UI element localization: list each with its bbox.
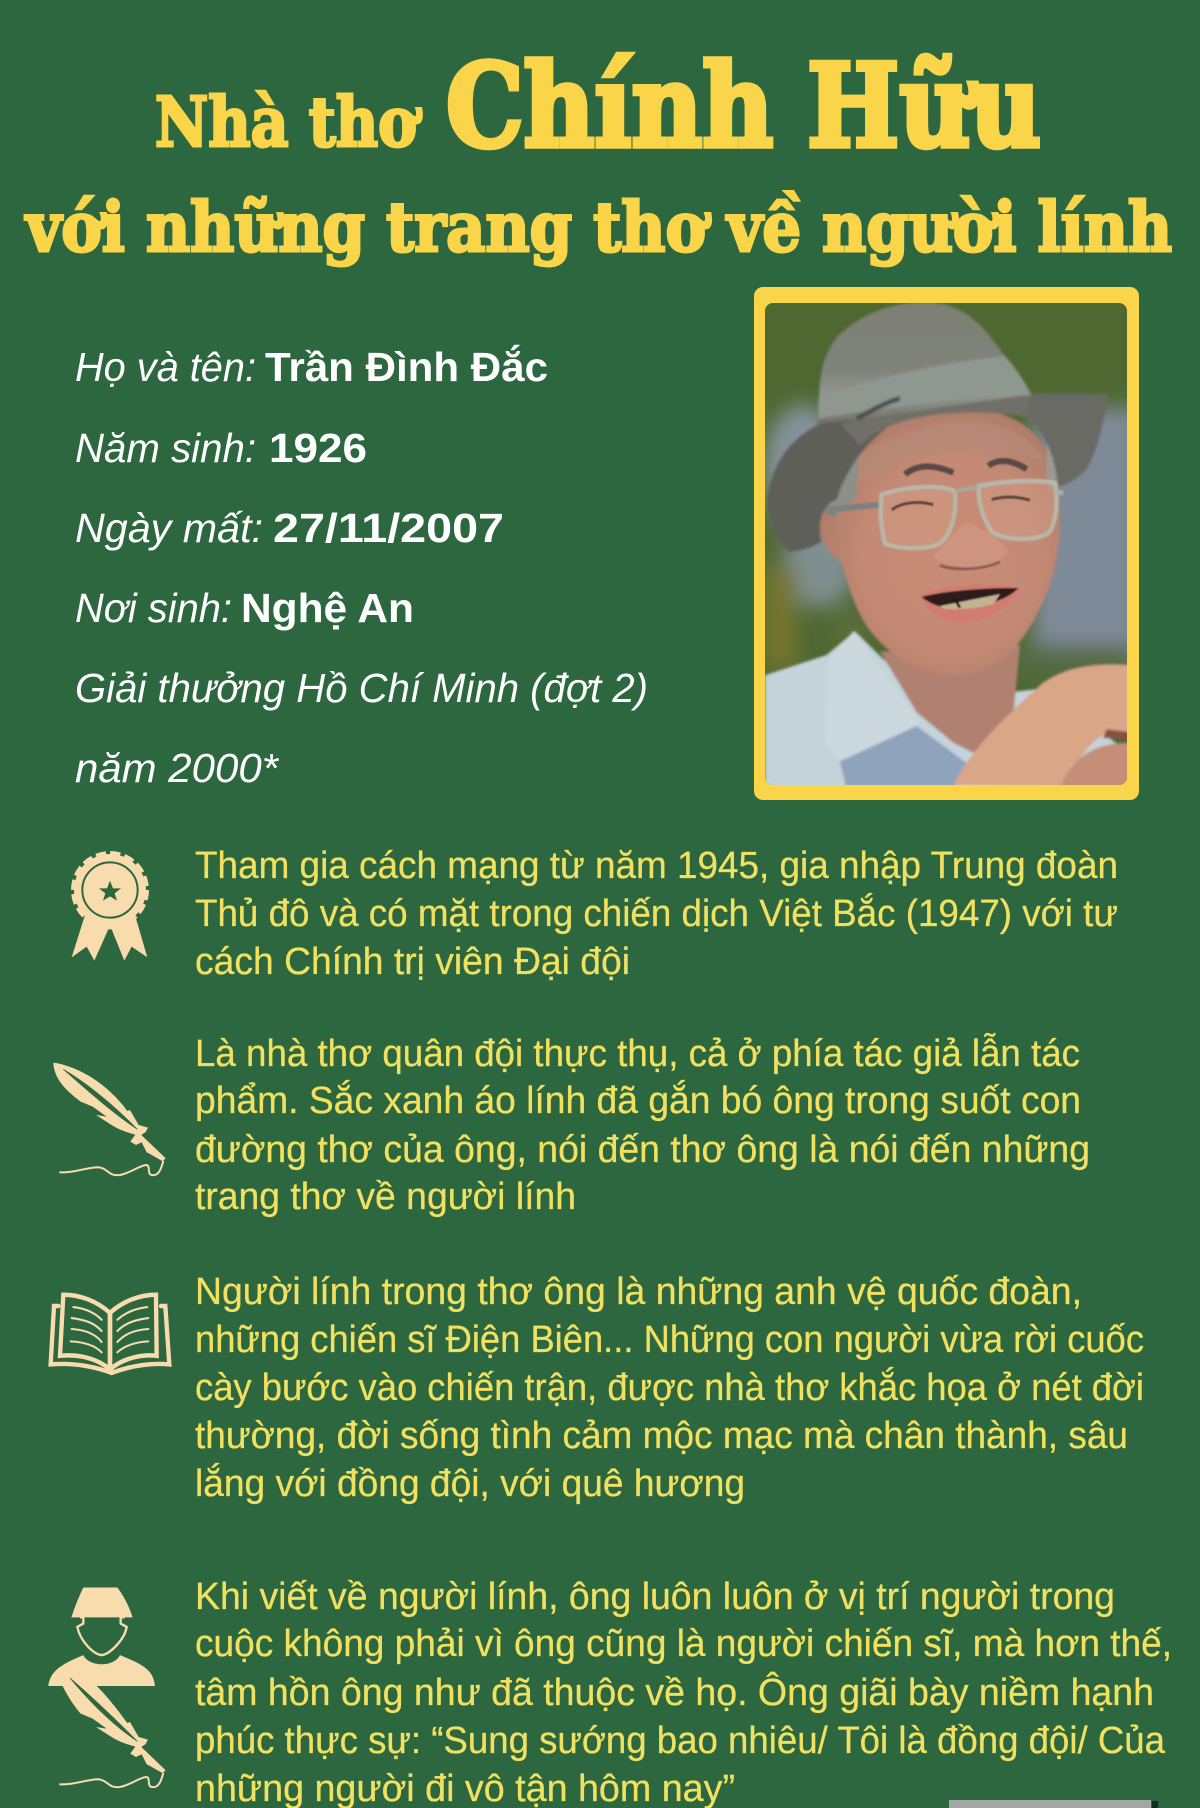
text block: soldiers in his poetry: lắng với đồng đội, với quê hương — [195, 1462, 745, 1505]
biography facts: Ngày mất: — [75, 505, 263, 551]
text block: military poet: Là nhà thơ quân đội thực thụ, cả ở phía tác giả lẫn tác — [195, 1032, 1080, 1075]
title — [24, 39, 1172, 268]
text block: writing about soldiers: Khi viết về người lính, ông luôn luôn ở vị trí người trong — [195, 1576, 1115, 1618]
text block: soldiers in his poetry: thường, đời sống tình cảm mộc mạc mà chân thành, sâu — [195, 1415, 1128, 1457]
biography facts — [75, 344, 648, 791]
icon: soldier with quill — [48, 1587, 166, 1787]
title: Nhà thơ — [155, 83, 422, 163]
text block: writing about soldiers — [195, 1576, 1172, 1808]
biography facts: Nghệ An — [241, 585, 414, 631]
cropped strip at bottom edge — [949, 1800, 1158, 1808]
text block: soldiers in his poetry: những chiến sĩ Điện Biên... Những con người vừa rời cuốc — [195, 1319, 1144, 1361]
text block: military poet: đường thơ của ông, nói đến thơ ông là nói đến những — [195, 1129, 1090, 1171]
icon: medal rosette — [72, 854, 147, 961]
icon: open book — [51, 1295, 169, 1373]
text block: military poet: phẩm. Sắc xanh áo lính đã gắn bó ông trong suốt con — [195, 1079, 1081, 1122]
biography facts: Năm sinh: — [75, 425, 256, 471]
biography facts: năm 2000* — [75, 745, 280, 791]
text block: joining the revolution: Tham gia cách mạng từ năm 1945, gia nhập Trung đoàn — [195, 845, 1118, 887]
text block: soldiers in his poetry — [195, 1271, 1144, 1505]
text block: joining the revolution — [195, 845, 1118, 983]
biography facts: 1926 — [269, 425, 367, 471]
title: Chính Hữu — [446, 39, 1041, 173]
text block: soldiers in his poetry: cày bước vào chiến trận, được nhà thơ khắc họa ở nét đời — [195, 1366, 1144, 1409]
text block: military poet — [195, 1032, 1090, 1218]
biography facts: Trần Đình Đắc — [265, 344, 548, 390]
text block: soldiers in his poetry: Người lính trong thơ ông là những anh vệ quốc đoàn, — [195, 1271, 1082, 1313]
front brim of the hat — [840, 394, 1037, 446]
biography facts: Nơi sinh: — [75, 585, 232, 631]
text block: military poet: trang thơ về người lính — [195, 1176, 576, 1218]
biography facts: 27/11/2007 — [273, 505, 504, 551]
portrait photo with yellow frame — [754, 287, 1140, 800]
text block: joining the revolution: cách Chính trị viên Đại đội — [195, 941, 630, 983]
text block: writing about soldiers: cuộc không phải vì ông cũng là người chiến sĩ, mà hơn thế, — [195, 1623, 1172, 1665]
biography facts: Họ và tên: — [75, 344, 256, 390]
text block: writing about soldiers: tâm hồn ông như đã thuộc về họ. Ông giãi bày niềm hạnh — [195, 1670, 1154, 1714]
text block: joining the revolution: Thủ đô và có mặt trong chiến dịch Việt Bắc (1947) với tư — [195, 892, 1118, 935]
biography facts: Giải thưởng Hồ Chí Minh (đợt 2) — [75, 665, 648, 711]
icon: quill pen — [53, 1063, 166, 1175]
text block: writing about soldiers: phúc thực sự: “Sung sướng bao nhiêu/ Tôi là đồng đội/ Của — [195, 1720, 1166, 1762]
